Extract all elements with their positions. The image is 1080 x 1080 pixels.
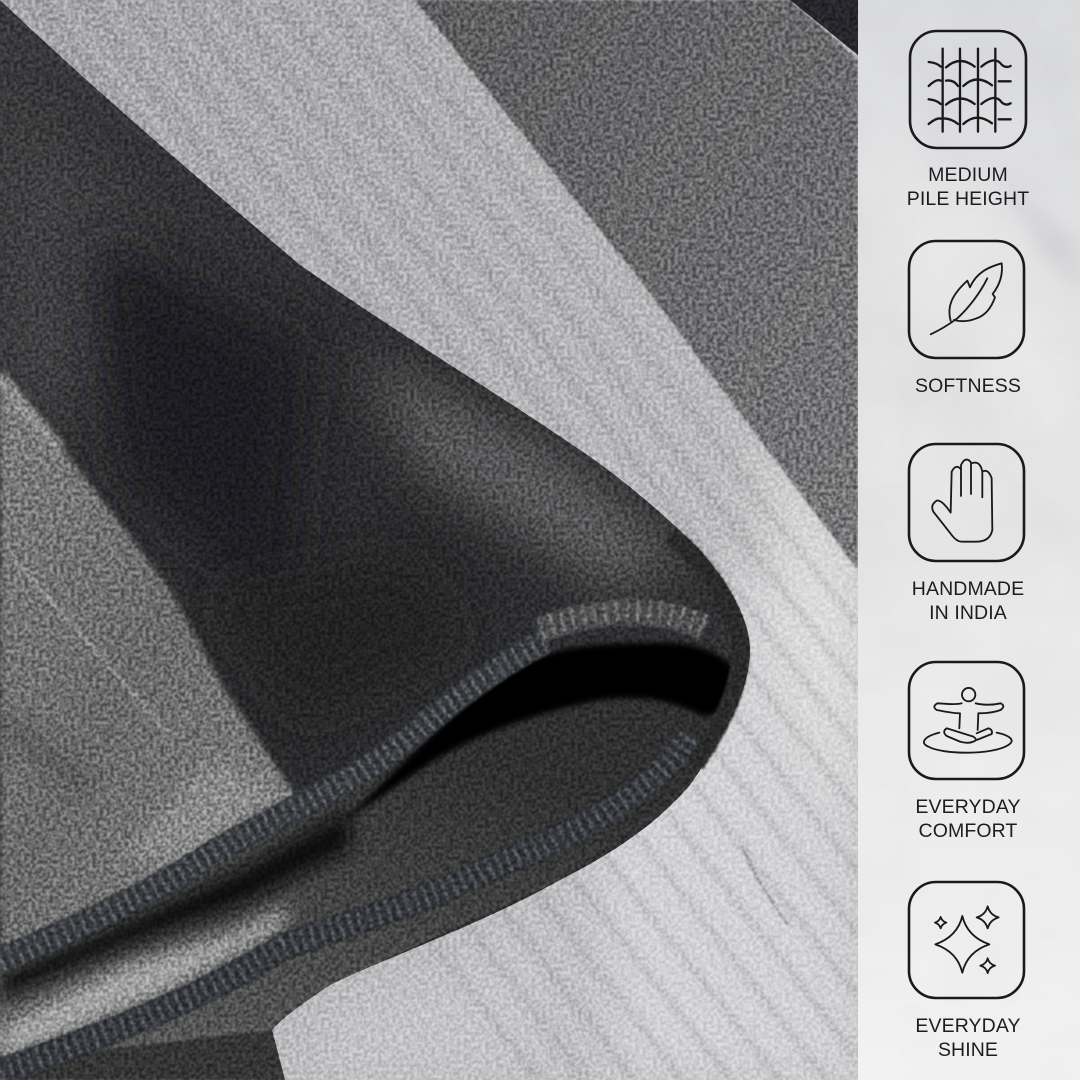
yarn texture xyxy=(0,0,858,1080)
label: handmade in india: HANDMADE xyxy=(912,578,1024,600)
grey block xyxy=(0,368,297,965)
icon: sparkles xyxy=(909,882,1024,998)
lit underside strip xyxy=(0,905,290,1060)
label: medium pile height xyxy=(907,164,1029,210)
icon: hand xyxy=(909,444,1024,561)
label: everyday comfort xyxy=(915,796,1021,842)
label: medium pile height: PILE HEIGHT xyxy=(907,188,1029,210)
dark carpet corner xyxy=(790,0,858,55)
lower left dark base xyxy=(0,1030,285,1080)
underside weave xyxy=(0,775,690,1080)
fold opening xyxy=(340,642,738,822)
icon: feather xyxy=(909,241,1024,358)
side panel xyxy=(858,0,1080,1080)
label: everyday shine xyxy=(915,1015,1021,1061)
label: everyday comfort: COMFORT xyxy=(919,820,1017,842)
label: medium pile height: MEDIUM xyxy=(928,164,1008,186)
grey carpet stripe xyxy=(415,0,858,570)
label: everyday shine: SHINE xyxy=(938,1039,998,1061)
label: everyday comfort: EVERYDAY xyxy=(915,796,1021,818)
label: softness: SOFTNESS xyxy=(915,375,1021,397)
icon: meditation comfort xyxy=(909,662,1024,779)
label: handmade in india: IN INDIA xyxy=(929,602,1007,624)
label: handmade in india xyxy=(912,578,1024,624)
shadow under the upper rope xyxy=(0,810,350,1000)
carpet background xyxy=(0,0,858,1080)
icon: pile height weave xyxy=(910,31,1026,148)
label: everyday shine: EVERYDAY xyxy=(915,1015,1021,1037)
woven rope edges xyxy=(0,535,740,1072)
rug: charcoal and grey blocks with underside xyxy=(0,0,750,1080)
